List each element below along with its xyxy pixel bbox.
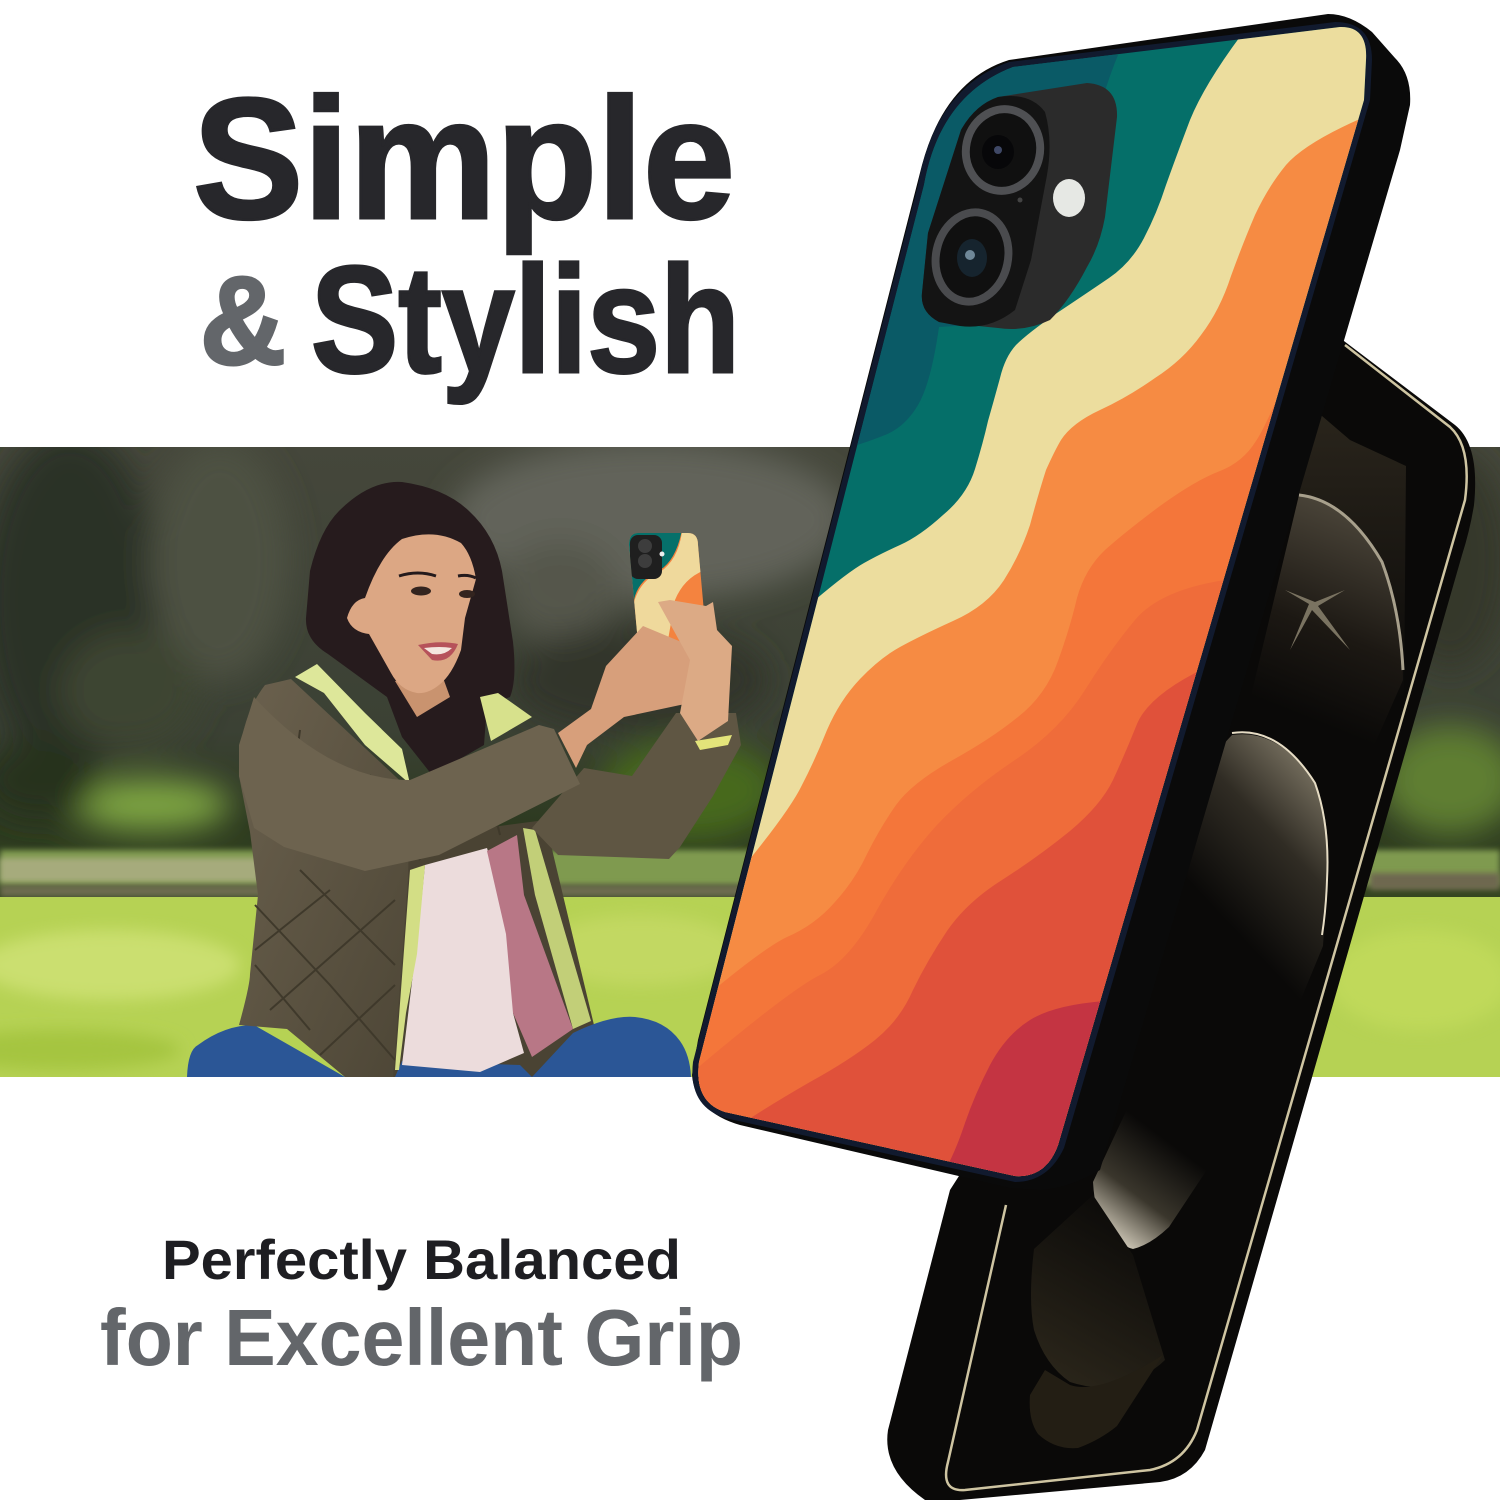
phone black body [887,338,1475,1500]
collar right [480,693,532,741]
case blue rim [692,22,1372,1182]
wallpaper lower dome [1192,734,1328,980]
dark lens surround [922,96,1050,327]
face [347,534,476,693]
orange layer 3 [698,580,1224,1176]
case side wall [692,14,1410,1190]
jacket torso [239,679,410,1077]
near arm [239,697,580,871]
lower dome [1030,1370,1154,1448]
wallpaper [1030,410,1406,1448]
orange layer 2 [698,402,1276,1176]
lower lens [927,205,1017,309]
far hand [658,600,732,741]
phone case: front [660,14,1410,1200]
photo: woman taking a selfie [187,482,741,1077]
camera module [922,83,1117,329]
yellow wrist strap [695,735,732,750]
wallpaper upper dome [1260,496,1403,710]
flash [1053,179,1085,217]
near hand and forearm [558,626,699,768]
crimson wave [950,1002,1100,1176]
camera island [922,83,1117,329]
photo band: park background [0,430,1500,1077]
back phone: iPhone behind the case [887,338,1475,1500]
title: Simple & Stylish [193,63,740,405]
orange wave [698,120,1358,1176]
hair [306,482,514,775]
quilting on jacket [255,730,500,1060]
dark teal wave [857,54,1118,445]
heading line: & Stylish: & [200,252,286,391]
tagline: Perfectly Balanced for Excellent Grip [100,1228,743,1382]
facial features [399,573,476,661]
plaid shirt [487,835,573,1057]
teal wave [698,27,1366,1064]
neck [395,675,450,717]
upper screen tint [1299,416,1406,626]
jacket right lining [523,828,591,1029]
jacket base behind shirt [391,820,594,1077]
rainbow arc [1299,495,1403,670]
printed wave artwork [698,27,1366,1176]
gold frame edge [946,345,1467,1490]
cream wave [698,27,1366,1176]
tagline line 1: Perfectly Balanced [162,1228,681,1291]
jacket left lining [395,865,425,1070]
tagline line 2: for Excellent Grip [100,1293,743,1382]
collar left [295,664,410,784]
heading line: & Stylish: Stylish [311,235,740,405]
lens flare star [1285,590,1350,650]
far arm [532,713,741,859]
bottom glowing dome [1093,1120,1200,1249]
middle dome [1031,1195,1165,1387]
heading line: Simple: Simple [193,63,735,255]
mini phone in hand [629,533,704,642]
jeans [187,1017,691,1077]
white tee [402,848,524,1072]
upper lens [958,102,1048,198]
red-orange wave [751,672,1196,1176]
